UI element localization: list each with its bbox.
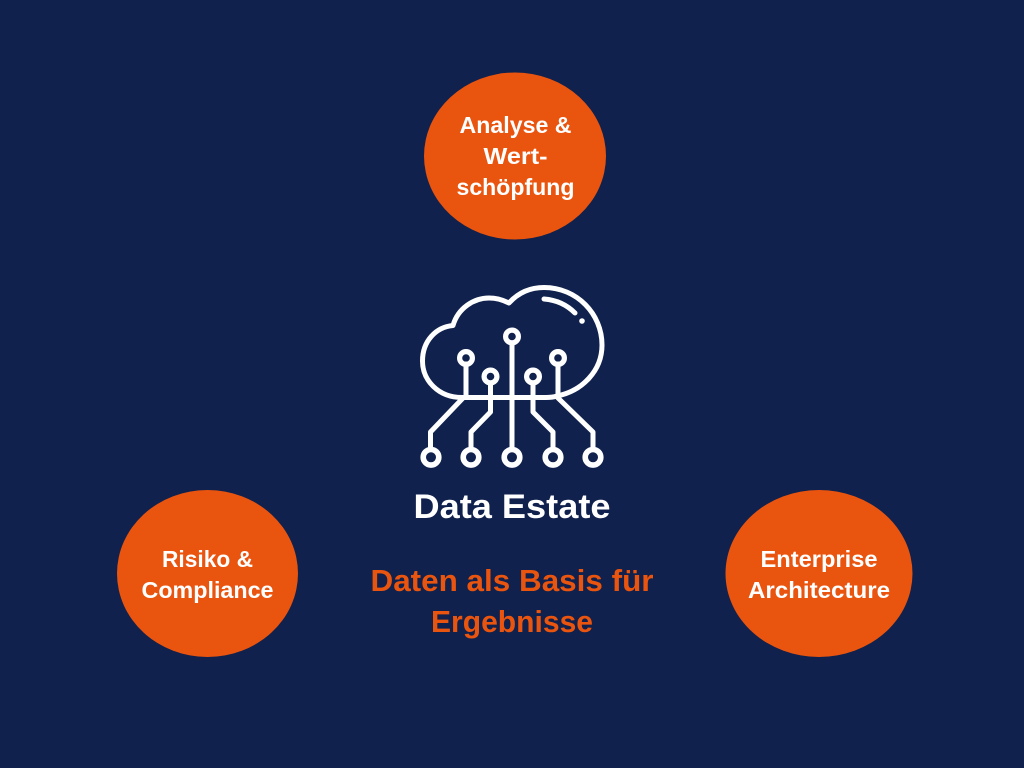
subheading: Daten als Basis für Ergebnisse [370, 563, 654, 639]
circle: Risiko & Compliance [117, 490, 298, 657]
circle: Analyse & Wertschöpfung: Wert- [484, 143, 548, 169]
circle: Enterprise Architecture [726, 490, 912, 657]
heading: Data Estate: Data Estate [414, 488, 610, 526]
circle: Analyse & Wertschöpfung: Analyse & [460, 112, 572, 138]
icon part: upper circuit nodes [460, 330, 564, 383]
icon: cloud with circuit lines [422, 288, 602, 465]
circle: Enterprise Architecture: Architecture [748, 577, 890, 603]
icon part: cloud highlight [544, 299, 575, 313]
circle: Risiko & Compliance: Risiko & [162, 546, 253, 572]
subheading: Daten als Basis für Ergebnisse: Daten als Basis für [370, 563, 654, 598]
circle: Analyse & Wertschöpfung: schöpfung [456, 174, 574, 200]
icon part: lower circuit nodes [423, 450, 601, 465]
icon part: cloud outline [422, 288, 602, 398]
subheading: Daten als Basis für Ergebnisse: Ergebnisse [431, 604, 593, 639]
circle: Enterprise Architecture: Enterprise [760, 546, 878, 572]
circle: Risiko & Compliance: Compliance [142, 577, 274, 603]
circle: Analyse & Wertschöpfung [424, 72, 606, 240]
icon part: circuit traces [430, 343, 593, 449]
